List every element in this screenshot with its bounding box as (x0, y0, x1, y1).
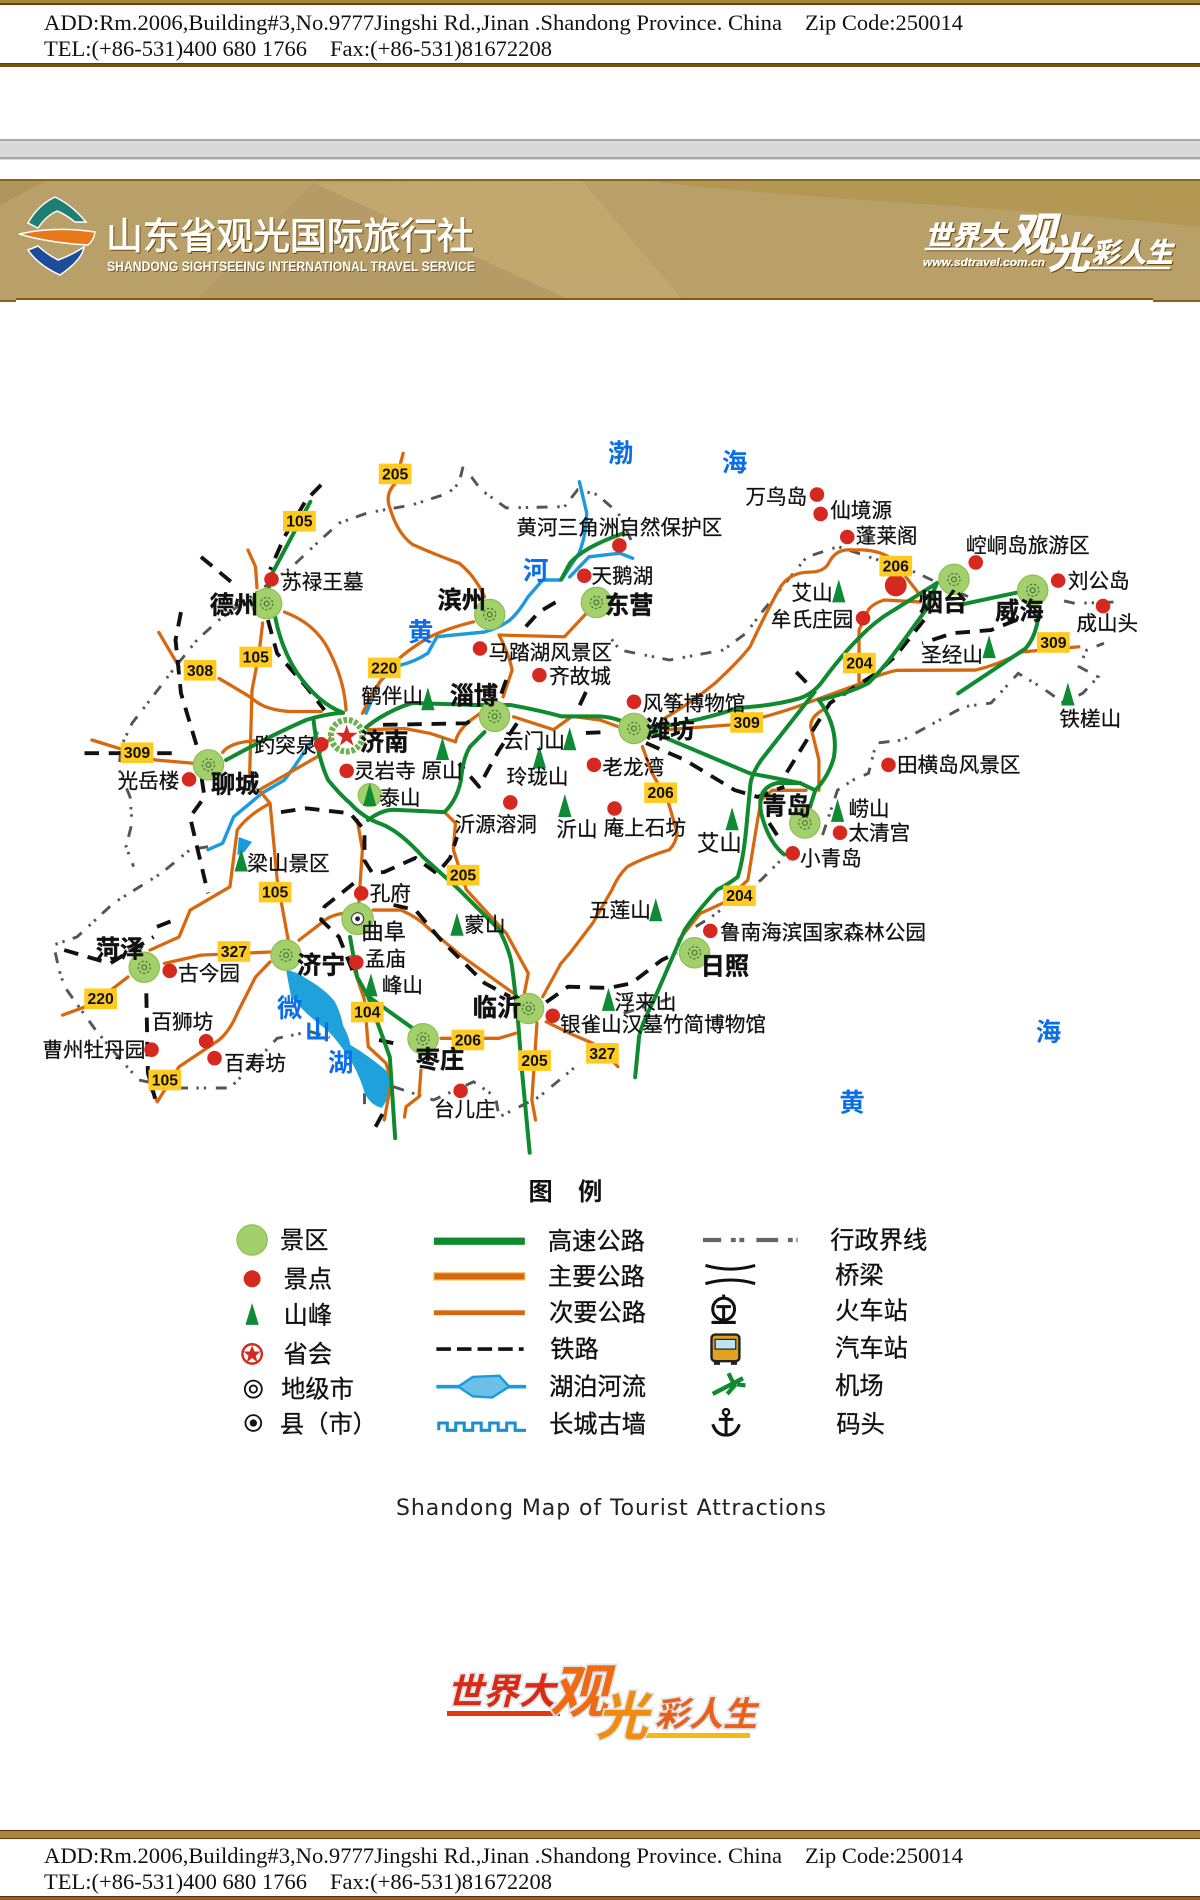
legend: main road: 主要公路 (548, 1264, 645, 1291)
map: attraction labels: 田横岛风景区 (897, 754, 1021, 777)
map: attraction labels: 台儿庄 (434, 1098, 496, 1121)
map: water body labels: 山 (305, 1017, 330, 1045)
bottom address footer: Fax:(+86-531)81672208 (330, 1869, 552, 1894)
map: attraction labels: 百狮坊 (152, 1011, 213, 1034)
legend: administrative boundary: 行政界线 (830, 1227, 927, 1254)
map: attraction labels: 庵上石坊 (604, 817, 686, 840)
map: attraction labels: 黄河三角洲自然保护区 (516, 517, 722, 540)
map: attraction labels: 梁山景区 (247, 852, 330, 875)
top address header: ADD:Rm.2006,Building#3,No.9777Jingshi Rd.,Jinan .Shandong Province. China (44, 10, 782, 35)
map: water body labels: 黄 (408, 619, 433, 647)
map: attraction labels: 趵突泉 (255, 735, 316, 758)
map: attraction labels: 太清宫 (848, 822, 910, 845)
map: highways (226, 502, 1039, 1153)
map: attraction labels: 鲁南海滨国家森林公园 (720, 921, 926, 944)
map: attraction labels: 峰山 (382, 975, 423, 998)
map: city labels: 日照 (701, 954, 749, 981)
legend: airport (713, 1373, 884, 1400)
map: railways (64, 485, 1016, 1127)
map: route number shields: 206 (455, 1032, 481, 1049)
top address header: TEL:(+86-531)400 680 1766 (44, 36, 307, 61)
legend: lakes and rivers (436, 1374, 646, 1401)
legend: attraction (244, 1266, 332, 1293)
tourist map and legend (42, 440, 1138, 1439)
legend: great wall: 长城古墙 (549, 1412, 646, 1439)
map: city labels: 德州 (210, 592, 258, 619)
legend: railway station: 火车站 (835, 1298, 908, 1325)
legend: main road (434, 1264, 645, 1291)
map: attraction labels: 光岳楼 (118, 770, 179, 793)
map: route number shields: 204 (726, 888, 753, 905)
legend: county city: 县（市） (280, 1412, 377, 1439)
map: attraction labels: 崂山 (848, 798, 890, 821)
map: attraction labels: 艾山 (792, 582, 833, 605)
map: attraction labels: 刘公岛 (1068, 570, 1130, 593)
company name: 山东省观光国际旅行社 (106, 216, 474, 257)
bottom slogan logo: 观 (547, 1661, 621, 1725)
legend: provincial capital (242, 1341, 332, 1368)
map: attraction labels: 古今园 (178, 963, 240, 986)
map: attraction labels: 鹤伴山 (361, 685, 423, 708)
map: city labels: 青岛 (762, 794, 811, 821)
map: attraction labels: 成山头 (1076, 612, 1138, 635)
map: attraction labels: 仙境源 (830, 500, 892, 523)
map: city labels: 潍坊 (646, 716, 695, 744)
legend title second character: 例 (578, 1179, 602, 1206)
bottom address footer: Zip Code:250014 (805, 1843, 963, 1868)
map: route number shields: 206 (883, 559, 909, 576)
map: city labels: 临沂 (473, 995, 521, 1022)
slogan: 世界大 (924, 220, 1012, 251)
legend: secondary road (434, 1300, 646, 1327)
legend: scenic area (237, 1225, 328, 1255)
map: route number shields: 308 (187, 663, 213, 680)
map: attraction labels: 风筝博物馆 (642, 692, 745, 715)
bottom slogan logo: 彩人生 (653, 1696, 764, 1734)
legend (237, 1179, 927, 1439)
map: provincial capital Jinan marker (331, 720, 362, 752)
legend: bus station (712, 1335, 908, 1365)
map: route number shields: 104 (354, 1005, 381, 1022)
company name english: SHANDONG SIGHTSEEING INTERNATIONAL TRAVEL SERVICE (107, 258, 475, 274)
legend: lakes and rivers: 湖泊河流 (549, 1374, 646, 1401)
legend: scenic area: 景区 (280, 1227, 328, 1254)
map: mountain peaks (235, 579, 1075, 1011)
map: attraction labels: 圣经山 (921, 644, 983, 667)
map: route number shields: 205 (450, 868, 476, 885)
legend: bus station: 汽车站 (835, 1335, 908, 1362)
map: route number shields: 220 (87, 991, 114, 1008)
legend: pier: 码头 (836, 1412, 885, 1439)
map: water body labels: 海 (722, 450, 747, 478)
map: route number shields: 205 (521, 1053, 548, 1070)
map: route number shields: 105 (286, 514, 313, 531)
map: attraction labels: 小青岛 (800, 847, 862, 870)
map: main roads (63, 453, 1079, 1120)
map: attraction labels: 艾山 (697, 831, 742, 856)
map: route number shields: 105 (243, 649, 269, 666)
map: administrative boundary (54, 467, 1113, 1117)
bottom slogan logo: 光 (593, 1689, 660, 1747)
map: route number shields: 204 (846, 655, 873, 672)
map: attraction labels: 孟庙 (365, 948, 406, 971)
company banner (0, 179, 1200, 303)
logo (19, 197, 95, 275)
legend: secondary road: 次要公路 (549, 1300, 646, 1327)
map: attraction labels: 玲珑山 (507, 766, 568, 789)
map: route number shields: 327 (221, 944, 247, 961)
map: city labels: 菏泽 (96, 937, 144, 964)
top address header: Zip Code:250014 (805, 10, 963, 35)
map: city labels: 烟台 (919, 589, 967, 617)
map: city labels: 威海 (995, 598, 1044, 625)
legend: pier (713, 1409, 885, 1439)
legend: expressway: 高速公路 (548, 1229, 645, 1256)
map: water body labels: 微 (277, 995, 303, 1023)
map: city labels: 聊城 (211, 771, 259, 799)
bottom slogan logo (445, 1661, 764, 1747)
map: water body labels: 黄 (839, 1090, 865, 1118)
map: attraction labels: 蓬莱阁 (856, 525, 918, 548)
map: route number shields (84, 464, 1070, 1090)
map: route number shields: 105 (152, 1072, 178, 1089)
legend: bridge (705, 1263, 884, 1290)
map: attraction labels: 天鹅湖 (592, 565, 653, 588)
map: attraction labels: 灵岩寺 原山 (354, 760, 463, 783)
map: attraction labels: 苏禄王墓 (281, 571, 364, 594)
lake: Weishan (286, 970, 392, 1108)
map: route number shields: 309 (124, 745, 150, 762)
map: attraction labels: 百寿坊 (224, 1052, 286, 1075)
legend: prefecture city (245, 1377, 354, 1404)
legend: peak: 山峰 (284, 1303, 332, 1330)
map: city labels: 东营 (605, 592, 653, 619)
map: attraction labels: 浮来山 (615, 992, 676, 1015)
slogan: 彩人生 (1091, 237, 1179, 268)
slogan (923, 210, 1179, 278)
map: attraction labels: 孔府 (370, 883, 411, 906)
slogan: 光 (1046, 231, 1099, 278)
map: city labels: 淄博 (450, 683, 498, 710)
legend: railway: 铁路 (550, 1337, 599, 1364)
map: attraction labels: 曲阜 (361, 919, 406, 944)
map: attraction points (144, 487, 1110, 1098)
map: attraction labels: 铁槎山 (1059, 708, 1121, 731)
bottom address footer: ADD:Rm.2006,Building#3,No.9777Jingshi Rd.,Jinan .Shandong Province. China (44, 1843, 782, 1868)
legend: attraction: 景点 (284, 1266, 332, 1293)
map: attraction labels: 老龙湾 (602, 757, 664, 780)
map: water body labels: 海 (1036, 1019, 1061, 1047)
map caption: Shandong Map of Tourist Attractions (396, 1496, 826, 1521)
map: attraction labels: 崆峒岛旅游区 (966, 535, 1090, 558)
bottom address footer: TEL:(+86-531)400 680 1766 (44, 1869, 307, 1894)
map: route number shields: 309 (1040, 635, 1067, 652)
legend: expressway (434, 1229, 645, 1256)
legend: prefecture city: 地级市 (281, 1377, 354, 1404)
map: attraction labels: 五莲山 (589, 900, 651, 923)
map: city labels (96, 587, 1044, 1074)
legend: great wall (439, 1412, 646, 1439)
map: water body labels: 河 (523, 557, 548, 585)
map: attraction labels: 蒙山 (464, 914, 505, 937)
map: route number shields: 205 (382, 466, 409, 483)
legend: bridge: 桥梁 (835, 1263, 884, 1290)
map: attraction labels (42, 486, 1138, 1121)
map: attraction labels: 沂山 (556, 818, 598, 841)
legend: railway station (712, 1295, 908, 1325)
grey separator bar (0, 139, 1200, 160)
top address header (0, 0, 1200, 67)
slogan: 观 (1008, 210, 1065, 260)
map: attraction labels: 云门山 (503, 730, 565, 753)
map: route number shields: 206 (647, 785, 674, 802)
top address header: Fax:(+86-531)81672208 (330, 36, 552, 61)
legend: peak (245, 1303, 332, 1330)
map: water body labels: 湖 (328, 1050, 353, 1078)
map: attraction labels: 曹州牡丹园 (42, 1039, 145, 1062)
map: attraction labels: 齐故城 (549, 666, 611, 689)
map: attraction labels: 银雀山汉墓竹简博物馆 (560, 1014, 766, 1037)
map: city labels: 滨州 (438, 587, 486, 614)
bottom slogan logo: 世界大 (445, 1672, 563, 1712)
legend title: 图 (528, 1179, 553, 1206)
map: attraction labels: 马踏湖风景区 (488, 641, 612, 664)
map: attraction labels: 泰山 (379, 787, 421, 810)
map: rivers and lakes (208, 482, 633, 1108)
map: route number shields: 327 (589, 1046, 616, 1063)
map: city labels: 济南 (360, 729, 408, 756)
map: water body labels (277, 440, 1061, 1118)
legend: provincial capital: 省会 (284, 1341, 332, 1368)
bottom address footer (0, 1830, 1200, 1900)
map: city labels: 枣庄 (416, 1046, 464, 1074)
map: route number shields: 309 (734, 715, 760, 732)
map: route number shields: 105 (262, 885, 289, 902)
map: scenic area city markers (129, 564, 1048, 1054)
map: route number shields: 220 (371, 660, 398, 677)
map: water body labels: 渤 (608, 440, 633, 468)
map: attraction labels: 沂源溶洞 (455, 814, 537, 837)
map: city labels: 济宁 (297, 952, 345, 979)
map: attraction labels: 万鸟岛 (745, 486, 807, 509)
legend: airport: 机场 (835, 1373, 884, 1400)
slogan: www.sdtravel.com.cn (923, 257, 1045, 269)
map: attraction labels: 牟氏庄园 (771, 609, 853, 632)
